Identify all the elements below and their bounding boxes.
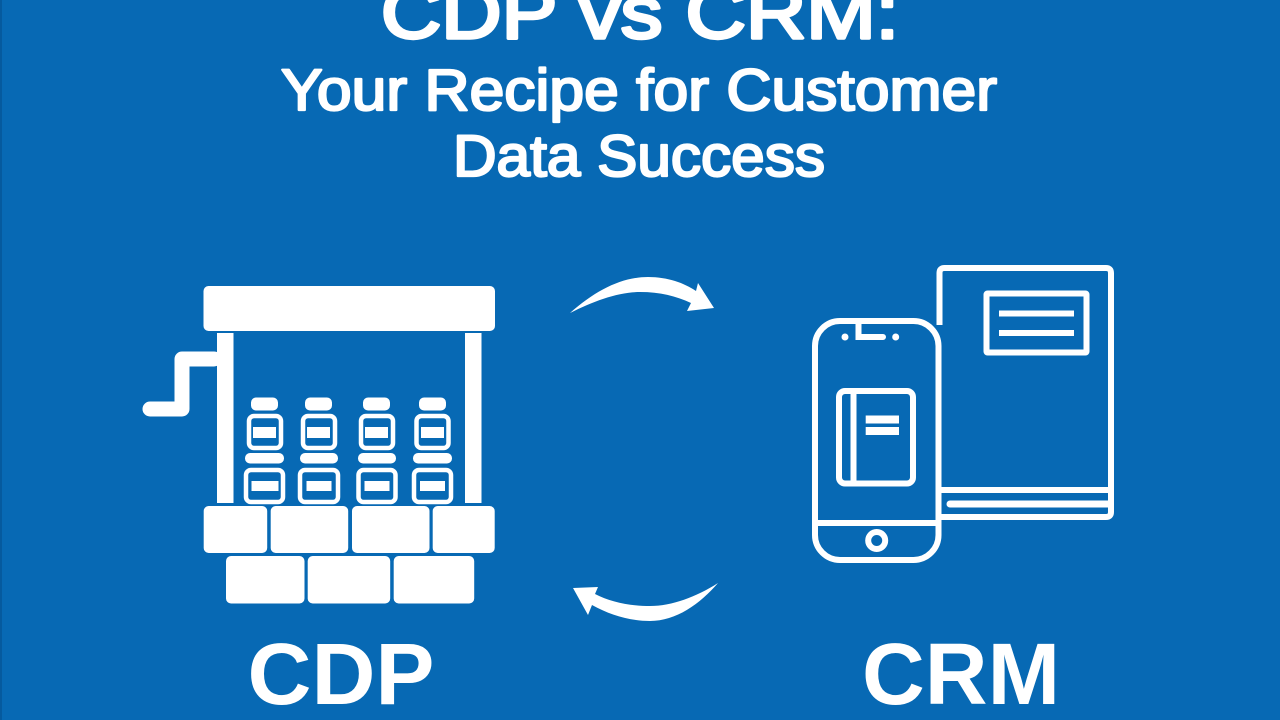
icon: CRM phone and book [815,268,1111,560]
crank handle [150,359,214,409]
brick base [204,506,495,604]
smartphone [815,321,938,560]
small book on phone screen [839,391,913,484]
large book [940,268,1111,517]
jars [245,398,452,502]
arrow: CRM to CDP [573,583,718,621]
subtitle: Data Success [453,124,825,189]
pantry posts [217,333,482,503]
subtitle: Your Recipe for Customer [281,58,997,123]
book cover label [986,294,1086,352]
arrow: CDP to CRM [570,277,714,313]
subtitle [281,58,997,189]
pantry roof [204,286,495,331]
icon: CDP pantry [150,286,495,604]
